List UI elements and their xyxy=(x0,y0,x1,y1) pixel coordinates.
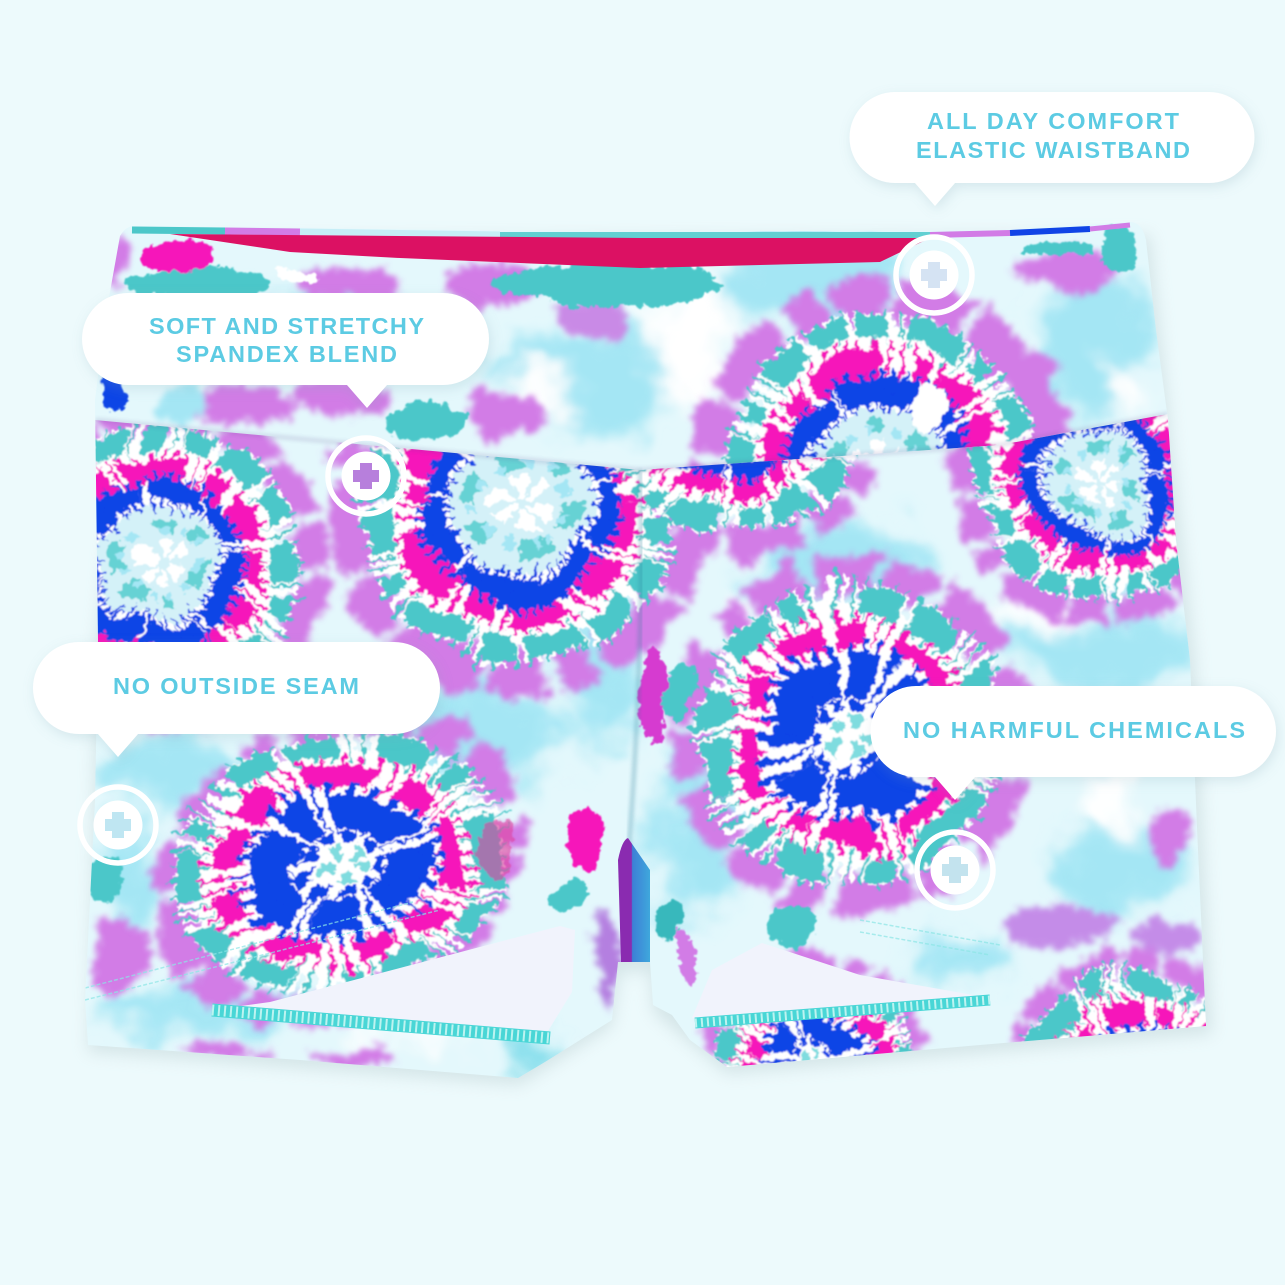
leg stitching left xyxy=(85,902,440,1000)
callout: soft and stretchy: SPANDEX BLEND xyxy=(176,341,397,367)
callout: all day comfort: ELASTIC WAISTBAND xyxy=(916,137,1190,163)
shorts drop shadow xyxy=(88,235,1212,1085)
inner lining right leg xyxy=(692,943,990,1018)
front waistband seam xyxy=(95,414,1168,470)
tie-dye shorts garment xyxy=(85,222,1206,1078)
callout: all day comfort xyxy=(850,92,1254,206)
callout: no outside seam xyxy=(33,642,440,757)
callout: all day comfort: ALL DAY COMFORT xyxy=(927,108,1180,134)
icon: plus waistband xyxy=(896,237,972,313)
waistband pattern xyxy=(99,223,1159,467)
red inner waistband xyxy=(170,234,930,268)
callout: no outside seam: NO OUTSIDE SEAM xyxy=(113,673,359,699)
inner back of shorts between legs xyxy=(618,838,650,962)
icon: plus chemicals xyxy=(917,832,993,908)
leg stitching right xyxy=(860,920,1000,955)
main fabric pattern xyxy=(86,414,1206,1078)
infographic canvas xyxy=(32,92,1280,1088)
callout: no harmful chemicals: NO HARMFUL CHEMICALS xyxy=(903,717,1245,743)
back waistband top strip xyxy=(132,225,1130,235)
callout: no harmful chemicals xyxy=(870,686,1276,800)
callout: soft and stretchy: SOFT AND STRETCHY xyxy=(149,313,424,339)
hem stitching right leg xyxy=(695,1000,990,1023)
callout: soft and stretchy xyxy=(82,293,489,408)
centre seam fold xyxy=(628,470,641,860)
hem stitching left leg xyxy=(212,1010,550,1038)
icon: plus spandex xyxy=(328,438,404,514)
inner lining left leg xyxy=(212,926,575,1031)
icon: plus seam xyxy=(80,787,156,863)
